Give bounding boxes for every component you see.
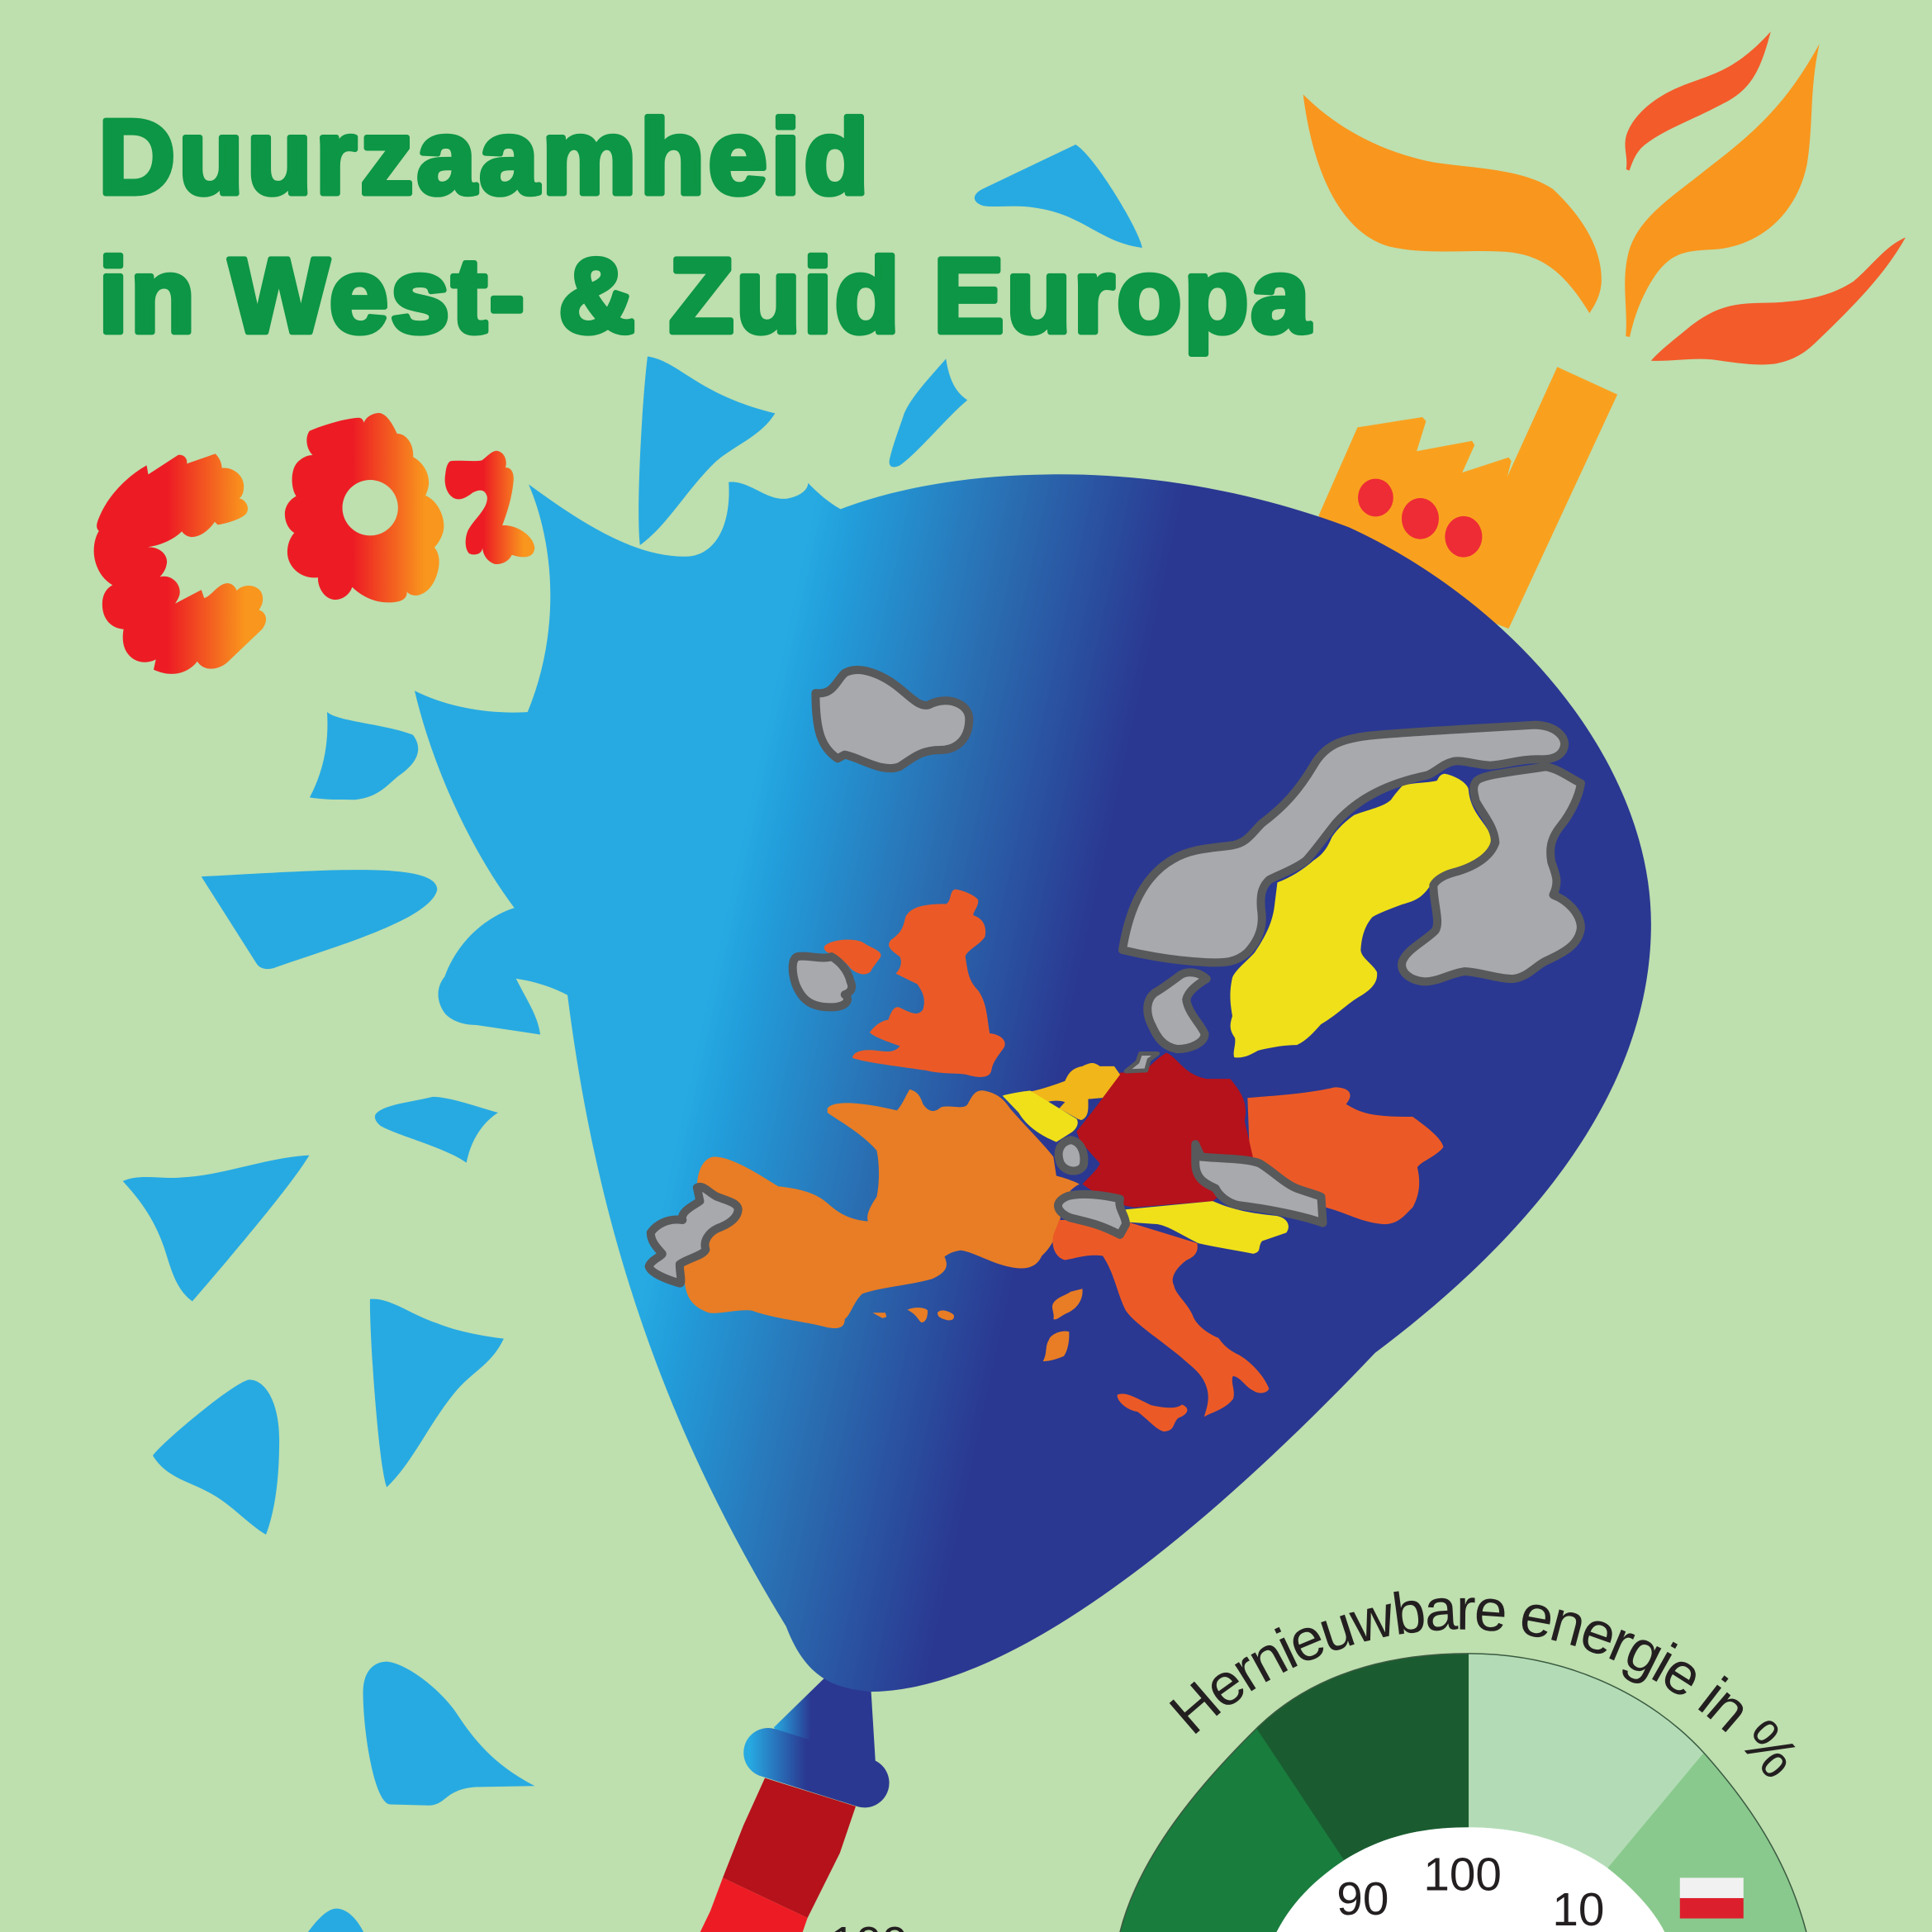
country: Portugal [649,1187,738,1284]
country: Netherlands [1030,1063,1120,1120]
map of Europe [649,670,1581,1431]
country: Switzerland [1058,1194,1126,1235]
country: Austria [1124,1201,1289,1254]
balloon shards [123,145,1142,1932]
icon: CO2 [94,413,534,674]
red ribbon [700,1778,856,1932]
bursting balloon [415,474,1651,1692]
title: Duurzaamheid [98,98,869,216]
title [98,98,1311,355]
country: United Kingdom [852,890,1005,1077]
shard: bottom [308,1909,363,1932]
countries: western and central Europe [649,890,1443,1431]
balloon knot [743,1728,890,1807]
gauge: scale labels: 90 [1336,1873,1388,1925]
country: Poland [1247,1087,1443,1224]
icon: Polish flag [1680,1877,1744,1919]
icon: flames [1303,31,1906,364]
gauge: scale labels [1336,1849,1604,1932]
countries: Scandinavia [1123,725,1581,1057]
gauge: sectors [1109,1639,1826,1932]
title: in West- & Zuid Europa [98,237,1311,355]
country: Iceland [815,670,969,768]
shard: top [975,145,1142,248]
icon: factory [1318,367,1617,629]
country: Italy [1052,1220,1269,1417]
country: Germany [1076,1053,1253,1208]
country: France and Spain [681,1089,1080,1328]
gauge: outline [1120,1654,1806,1932]
balloon neck [774,1678,876,1774]
region: Northern Ireland [824,940,881,974]
shards: lower group [123,1097,534,1806]
gauge: renewable energy [1119,1591,1807,1932]
country: Belgium [1003,1090,1078,1142]
country: Luxembourg [1059,1140,1084,1171]
island: Sicily [1118,1393,1187,1431]
gauge: scale labels: 100 [1423,1849,1502,1901]
country: Czech Republic [1195,1144,1323,1223]
gauge: inner hub [1276,1827,1664,1932]
region: Jutland tip [1126,1054,1158,1071]
country: Ireland [793,957,852,1007]
shards: upper group [202,357,967,969]
gauge: curved heading: Hernieuwbare energie in % [1170,1591,1796,1777]
islands: Balearics, Corsica, Sardinia [872,1289,1083,1361]
